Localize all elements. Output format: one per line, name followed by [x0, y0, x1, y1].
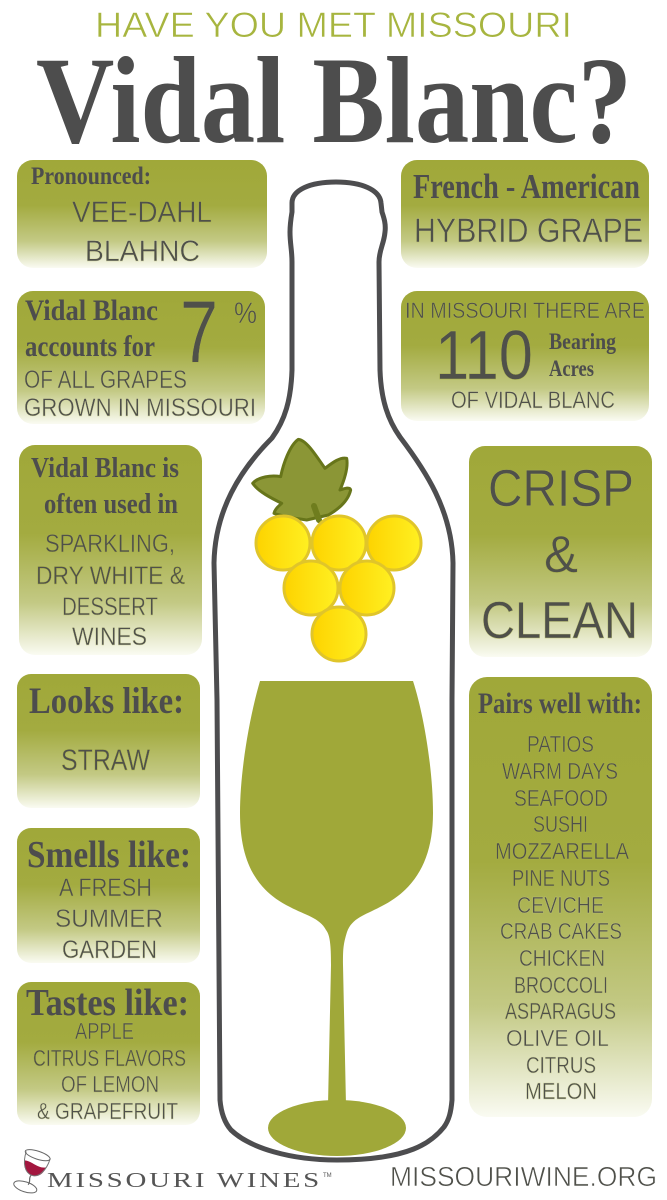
panel: pairs well with [469, 677, 652, 1117]
panel text: IN MISSOURI THERE ARE [405, 298, 645, 323]
unit label: Bearing [549, 329, 616, 354]
panel text: GROWN IN MISSOURI [24, 394, 256, 422]
panel text: SPARKLING, [45, 530, 175, 558]
panel heading: often used in [44, 488, 178, 520]
grape leaf [253, 439, 351, 520]
pairing list: CRAB CAKES [500, 918, 622, 944]
panel heading: Vidal Blanc is [31, 452, 179, 484]
panel: pronounced [17, 160, 267, 268]
panel heading: Smells like: [27, 834, 191, 876]
percent sign: % [234, 297, 257, 330]
pairing list: SEAFOOD [514, 785, 608, 811]
panel: bearing acres [401, 291, 649, 421]
panel: often used in [19, 445, 202, 655]
panel text: DESSERT [62, 593, 158, 621]
website url: MISSOURIWINE.ORG [390, 1161, 657, 1192]
panel: smells like [17, 828, 200, 964]
panel: seven percent [17, 282, 265, 424]
logo: missouri wines [12, 1147, 332, 1196]
icon: grape cluster with leaf [253, 439, 421, 661]
panel text: OF VIDAL BLANC [451, 387, 615, 414]
pronunciation: VEE-DAHL [72, 196, 212, 229]
pairing list: OLIVE OIL [506, 1025, 609, 1051]
pairing list: CEVICHE [517, 892, 604, 918]
panel: crisp and clean [469, 446, 652, 657]
bottle outline [214, 182, 453, 1160]
stat: 110: 110 [435, 316, 533, 394]
panel text: WINES [72, 623, 147, 651]
panel text: DRY WHITE & [36, 562, 185, 590]
panel text: CLEAN [481, 592, 638, 650]
heading: have you met missouri: HAVE YOU MET MISSOURI [95, 6, 572, 45]
wine glass [240, 681, 433, 1156]
panel heading: Vidal Blanc [25, 294, 158, 327]
panel: looks like [17, 674, 200, 808]
grapes [256, 516, 421, 661]
pairing list: SUSHI [533, 811, 588, 837]
panel heading: Tastes like: [26, 982, 189, 1024]
panel text: SUMMER [55, 905, 163, 933]
pronunciation: BLAHNC [85, 235, 200, 268]
pairing list: PINE NUTS [512, 865, 610, 891]
panel text: CITRUS FLAVORS [33, 1045, 186, 1071]
trademark: TM [323, 1173, 332, 1179]
panel heading: accounts for [25, 330, 155, 363]
pairing list: CITRUS [526, 1052, 596, 1078]
panel text: OF LEMON [61, 1071, 159, 1097]
pairing list: BROCCOLI [514, 972, 608, 998]
panel: hybrid grape [401, 160, 649, 268]
pairing list: MOZZARELLA [495, 838, 630, 864]
panel: tastes like [17, 982, 200, 1125]
unit label: Acres [549, 356, 594, 381]
wordmark: MISSOURI WINES [47, 1168, 322, 1192]
panel text: APPLE [75, 1018, 134, 1044]
icon: wine glass logo [12, 1147, 51, 1196]
leaf stem [314, 506, 319, 520]
pairing list: MELON [525, 1078, 597, 1104]
panel text: CRISP [488, 460, 634, 518]
pairing list: ASPARAGUS [505, 998, 616, 1024]
panel text: HYBRID GRAPE [414, 212, 643, 250]
panel text: A FRESH [59, 874, 152, 902]
pairing list: WARM DAYS [502, 758, 618, 784]
pairing list: PATIOS [527, 731, 594, 757]
panel text: STRAW [61, 744, 151, 777]
panel text: GARDEN [62, 936, 157, 964]
stat: 7: 7 [180, 282, 218, 381]
panel heading: Looks like: [29, 681, 184, 722]
panel text: & [544, 526, 578, 584]
pairing list: CHICKEN [519, 945, 605, 971]
panel heading: Pronounced: [31, 163, 151, 190]
panel text: OF ALL GRAPES [24, 366, 187, 394]
panel text: & GRAPEFRUIT [37, 1098, 178, 1124]
